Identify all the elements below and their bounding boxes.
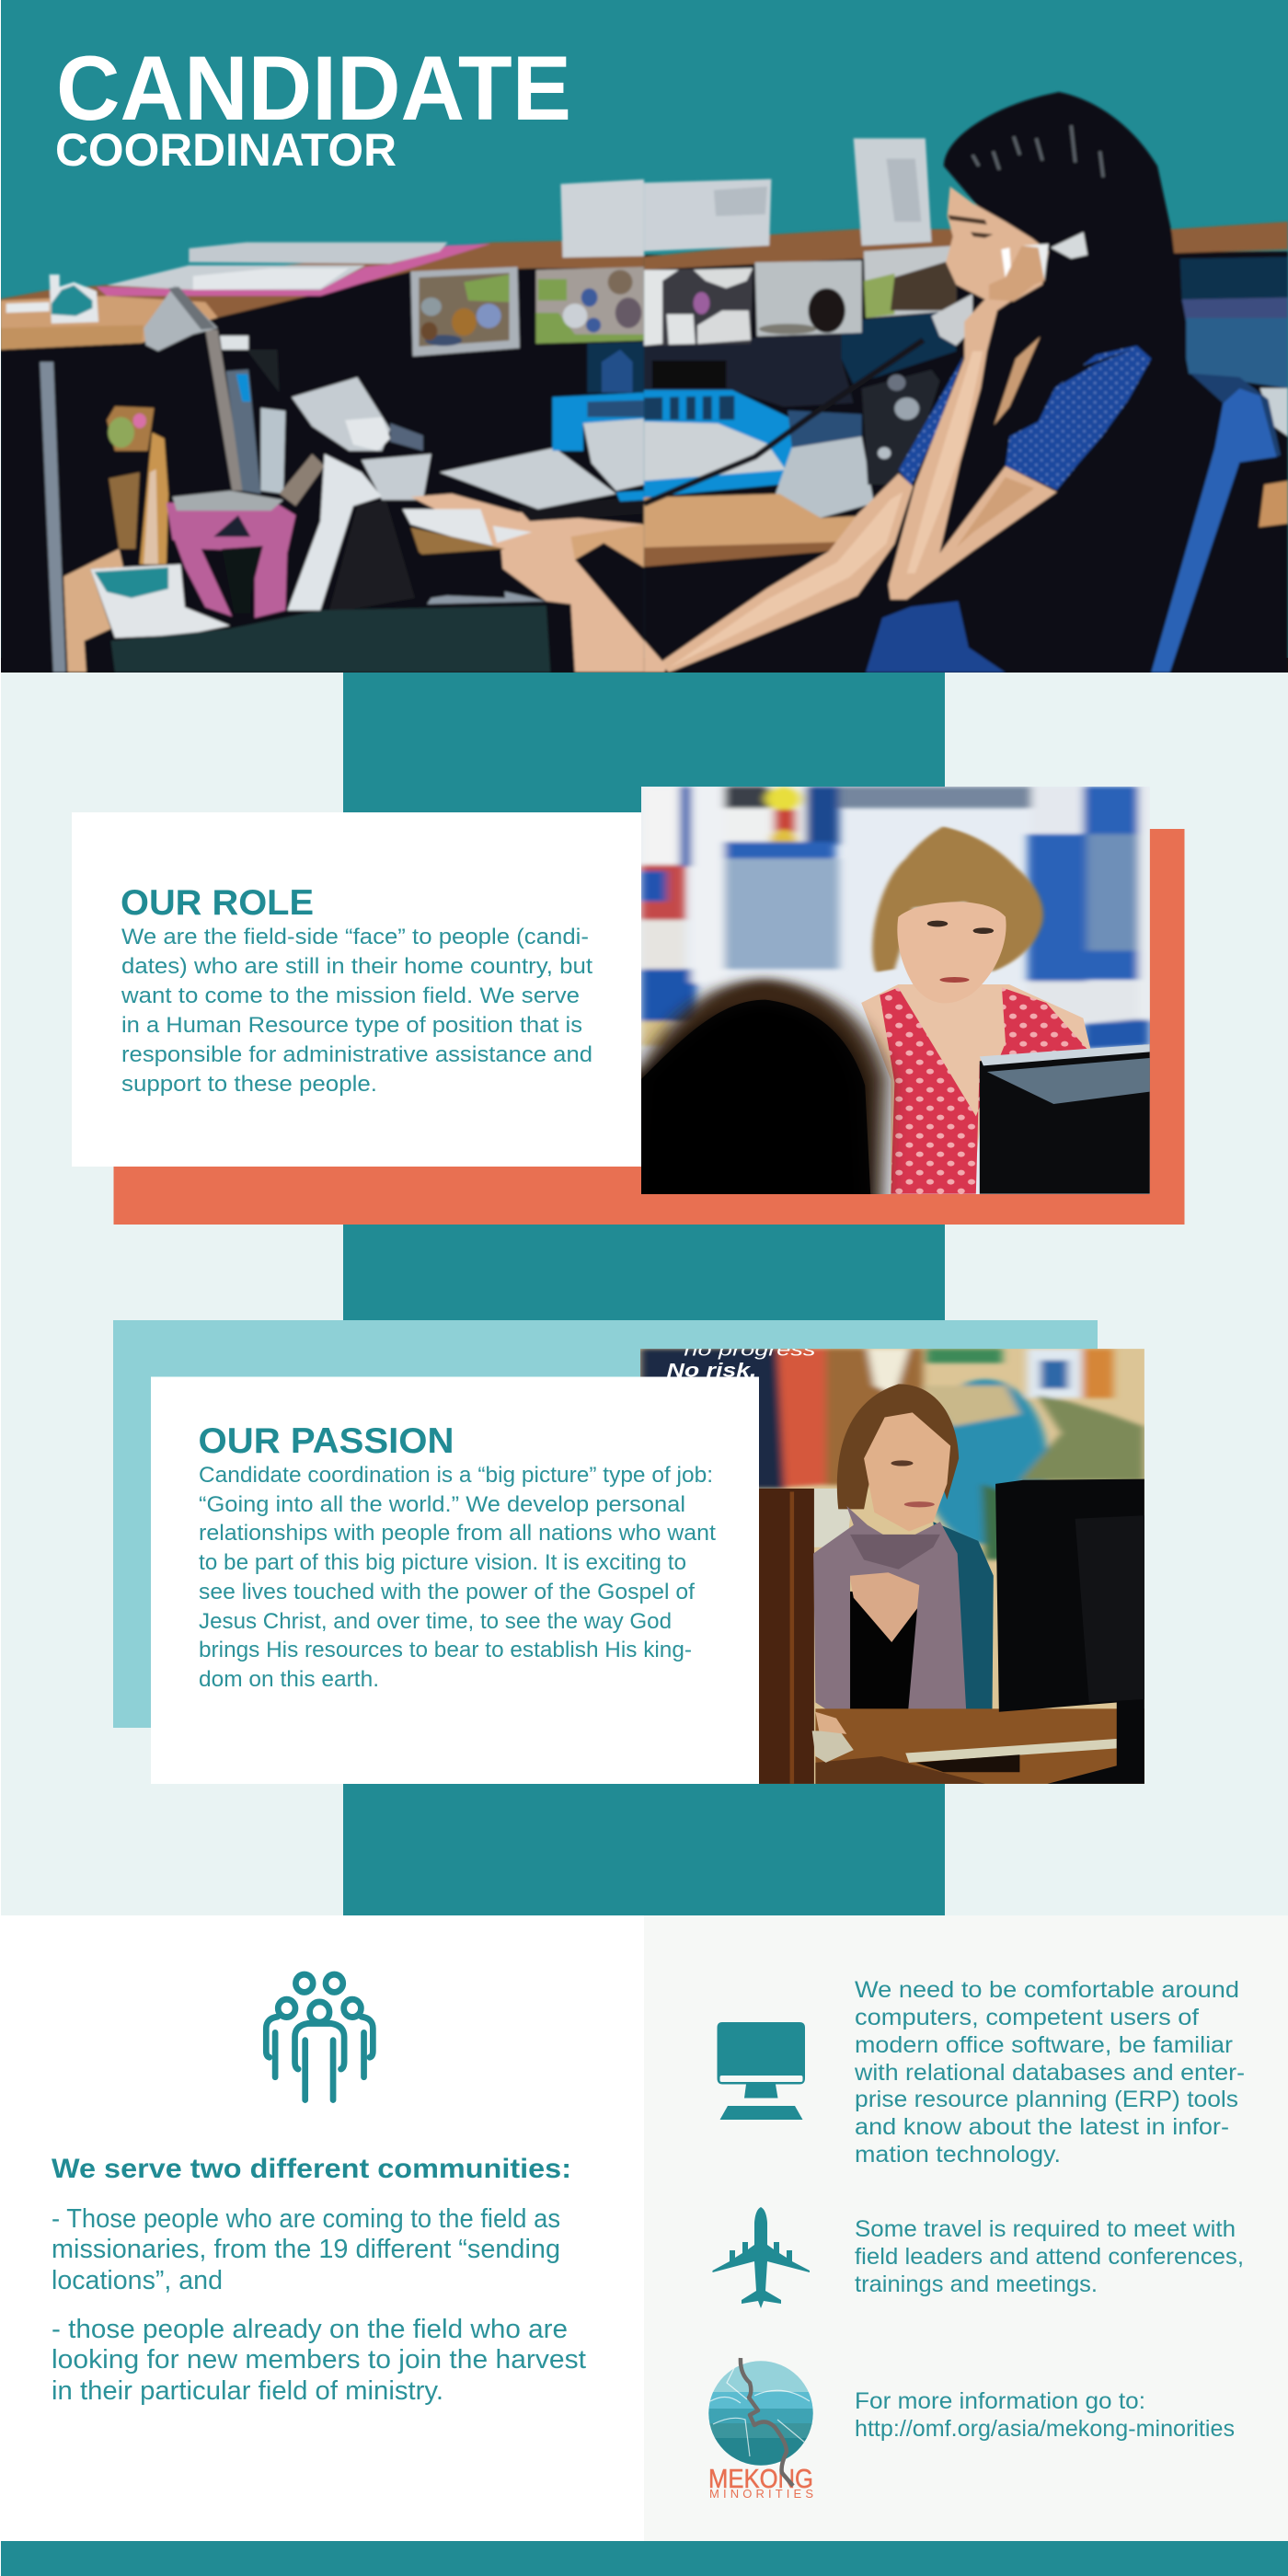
icon: group of people [266,1974,373,2099]
pale middle background with teal band [1,673,1288,1915]
text: communities list: looking for new members to join the harvest [52,2345,586,2375]
photo: woman with scarf at a computer [640,1340,1144,1784]
text: more information: For more information go to: [855,2388,1145,2414]
body text: our role: responsible for administrative assistance and [121,1042,592,1067]
title line: candidate: CANDIDATE [56,37,571,139]
text: more information: http://omf.org/asia/mekong-minorities [855,2416,1235,2442]
poster text in photo: No risk. [667,1359,756,1381]
body text: our role: support to these people. [121,1072,377,1097]
body text: our passion: Jesus Christ, and over time, to see the way God [199,1609,672,1634]
body text: our passion: relationships with people from all nations who want [199,1521,716,1546]
text: computer skills: modern office software, be familiar [855,2032,1233,2058]
text: computer skills: computers, competent users of [855,2005,1199,2030]
icon: airplane [712,2207,810,2308]
text: communities list: - those people already on the field who are [52,2315,568,2344]
text: communities list: in their particular field of ministry. [52,2376,443,2406]
text: computer skills: mation technology. [855,2142,1061,2168]
body text: our passion: dom on this earth. [199,1667,379,1692]
body text: our role: want to come to the mission field. We serve [121,983,580,1008]
footer bar [1,2541,1288,2576]
text: travel [855,2216,1244,2297]
hero illustration: woman on the phone at a desk [0,0,1288,673]
text: computer skills: prise resource planning (ERP) tools [855,2087,1238,2112]
poster text in photo: no progress [684,1340,815,1359]
body text: our role: We are the field-side “face” to people (candi- [121,925,589,949]
title line: coordinator: COORDINATOR [55,124,397,176]
text: communities list [52,2204,586,2406]
body text: our role [121,925,592,1097]
text: computer skills [854,1977,1245,2168]
text: communities list: locations”, and [52,2266,223,2295]
panel: our passion [113,1320,1144,1784]
logo: mekong minorities [708,2358,813,2501]
text: communities list: - Those people who are coming to the field as [52,2204,560,2234]
panel: communities [1,1915,644,2541]
body text: our role: dates) who are still in their home country, but [121,954,592,979]
poster text in photo [667,1349,814,1376]
text: computer skills: with relational databases and enter- [854,2060,1245,2086]
heading: our role: OUR ROLE [121,883,314,923]
hero right half: woman on the telephone [644,92,1288,673]
heading: our passion: OUR PASSION [199,1421,454,1461]
icon: computer [718,2022,805,2120]
body text: our passion: Candidate coordination is a “big picture” type of job: [199,1463,713,1488]
text: computer skills: We need to be comfortable around [855,1977,1239,2003]
logo: mekong minorities: MINORITIES [709,2487,813,2501]
body text: our passion: brings His resources to bear to establish His king- [199,1638,692,1662]
body text: our role: in a Human Resource type of position that is [121,1013,582,1038]
text: travel: Some travel is required to meet with [855,2216,1236,2242]
photo: woman in red at a computer [641,787,1150,1194]
text: travel: trainings and meetings. [855,2271,1098,2297]
heading: two communities: We serve two different communities: [52,2154,571,2184]
text: communities list: missionaries, from the 19 different “sending [52,2235,560,2264]
hero left half: desk and clutter [0,179,644,673]
text: more information [855,2388,1235,2442]
panel: skills and information [644,1915,1288,2541]
body text: our passion: to be part of this big picture vision. It is exciting to [199,1550,686,1575]
body text: our passion [199,1463,716,1692]
text: computer skills: and know about the latest in infor- [855,2114,1229,2140]
text: travel: field leaders and attend conferences, [855,2244,1244,2270]
body text: our passion: “Going into all the world.” We develop personal [199,1492,685,1517]
logo: mekong minorities: MEKONG [708,2465,813,2494]
panel: our role [72,787,1185,1233]
body text: our passion: see lives touched with the power of the Gospel of [199,1580,695,1604]
title [57,55,569,166]
